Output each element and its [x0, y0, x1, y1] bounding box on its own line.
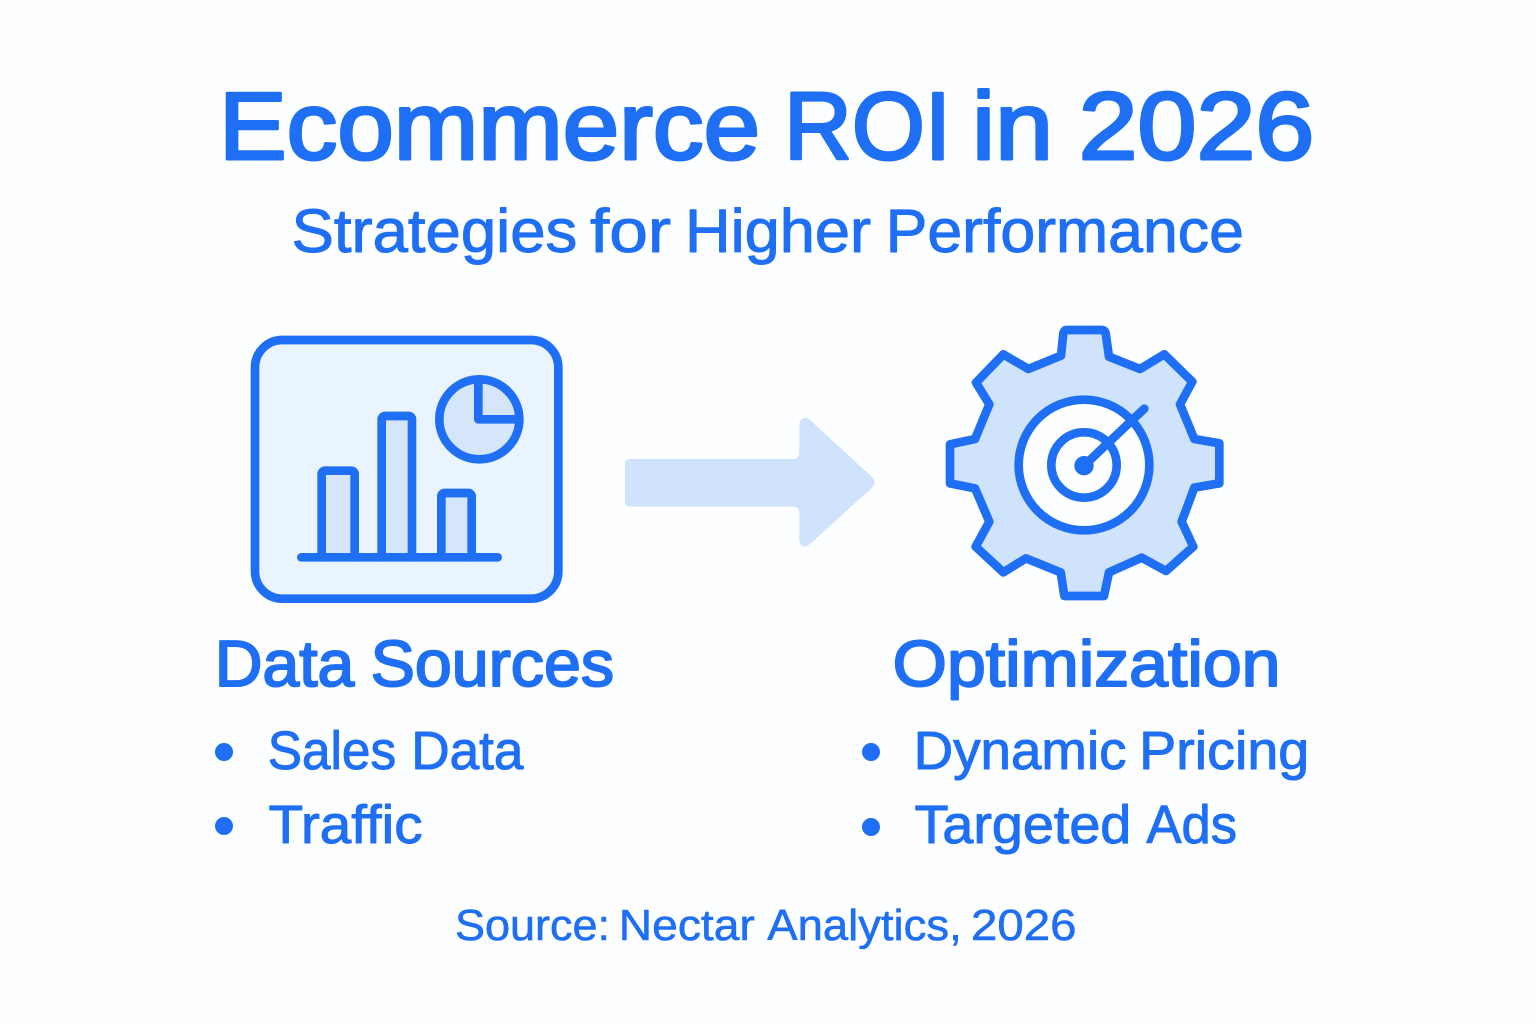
heading: data sources: Data	[215, 627, 355, 700]
list: data sources: Traffic	[268, 795, 422, 855]
heading: data sources: Sources	[371, 627, 614, 700]
list: optimization: Dynamic	[914, 721, 1126, 781]
subtitle: Higher	[685, 197, 871, 265]
panel: optimization	[862, 627, 1309, 855]
list: optimization: Pricing	[1139, 721, 1309, 781]
heading: optimization: Optimization	[893, 627, 1280, 700]
title: in	[972, 73, 1053, 180]
title: 2026	[1079, 73, 1314, 180]
list: data sources: Sales	[268, 721, 396, 781]
icon: gear with target	[950, 330, 1219, 596]
heading: data sources	[215, 627, 614, 700]
subtitle: Performance	[886, 197, 1244, 265]
panel: data sources	[215, 627, 614, 855]
subtitle	[292, 197, 1244, 265]
subtitle: Strategies	[292, 197, 577, 265]
target	[1019, 400, 1149, 530]
source note: Nectar	[619, 901, 755, 950]
pie chart	[439, 379, 519, 459]
source note: Source:	[455, 901, 610, 950]
list: optimization: Targeted	[914, 795, 1131, 855]
source note: Analytics,	[767, 901, 962, 950]
source note	[455, 901, 1076, 950]
title: ROI	[784, 73, 951, 180]
title	[219, 73, 1314, 180]
icon: data dashboard	[255, 340, 558, 599]
list: data sources: Data	[411, 721, 524, 781]
subtitle: for	[590, 197, 671, 265]
list: data sources	[215, 721, 524, 855]
list: optimization	[862, 721, 1309, 855]
title: Ecommerce	[219, 73, 760, 180]
arrow	[625, 418, 874, 546]
bar chart	[301, 416, 498, 557]
list: optimization: Ads	[1146, 795, 1237, 855]
source note: 2026	[971, 901, 1076, 950]
